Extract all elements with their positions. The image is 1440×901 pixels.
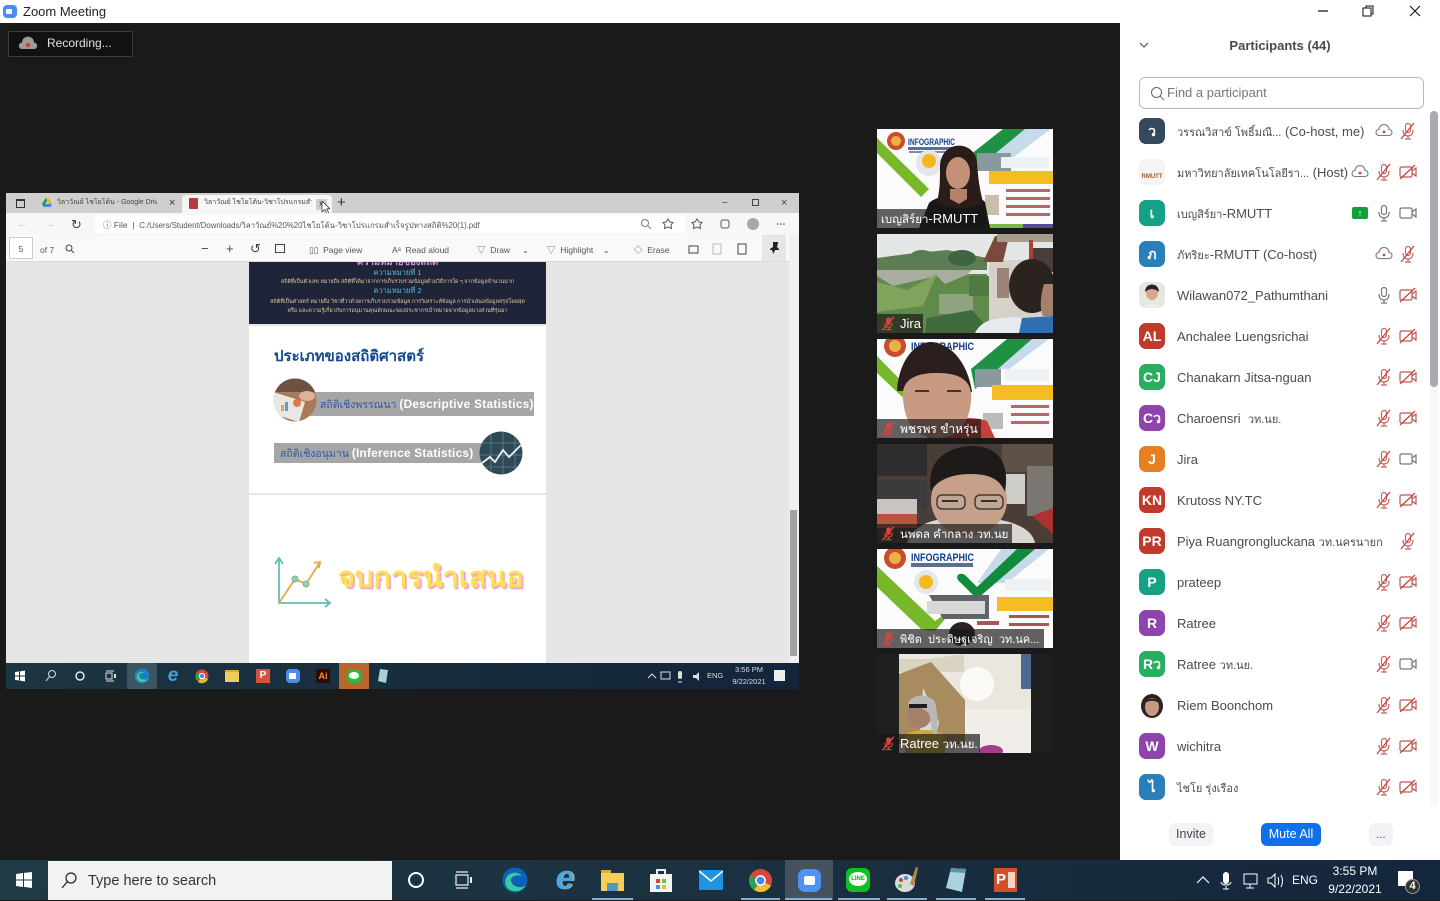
descriptive bar <box>289 392 534 416</box>
name: Riem Boonchom <box>1177 698 1273 713</box>
descriptive photo <box>274 378 316 422</box>
pdf tool icons <box>688 244 746 254</box>
notification bubble <box>1398 871 1413 886</box>
erase: ◇ Erase <box>634 245 669 255</box>
participant name: พชรพร ขำหรุ่น <box>900 422 978 436</box>
page count: of 7 <box>40 245 54 255</box>
name: Jira <box>1177 452 1198 467</box>
icon: muted <box>882 316 894 331</box>
video tile: พชรพร <box>877 339 1053 438</box>
new tab: + <box>337 194 346 211</box>
scrollbar thumb <box>790 510 797 656</box>
icon: recording cloud <box>18 36 38 49</box>
participant name: Jira <box>900 316 921 331</box>
meaning 1 text: สถิติที่เป็นตัวเลข หมายถึง สถิติที่ได้มาจากการเก็บรวบรวมข้อมูลด้วยวิธีการใด ๆ จากข้อมูลจำนวนมาก <box>281 279 514 285</box>
clock: 3:56 PM <box>735 665 763 674</box>
participant row 16 <box>1120 725 1430 766</box>
name: เบญสิร์ยา-RMUTT <box>1177 206 1272 221</box>
share indicator <box>1352 207 1368 219</box>
system tray <box>648 665 785 686</box>
slide background with presenter: INFOGRAPHIC <box>908 137 955 147</box>
tab close hover: × <box>319 199 324 210</box>
icon: powerpoint <box>256 669 270 683</box>
icon: edge active <box>127 663 157 689</box>
icon: edge <box>502 867 528 893</box>
icon: cortana <box>407 871 425 889</box>
participant row 14 <box>1120 643 1430 684</box>
participant row 4 <box>1120 233 1430 274</box>
collapse chevron <box>1139 41 1149 49</box>
window controls <box>1318 6 1420 16</box>
tray icons <box>648 671 699 682</box>
pdf page: definition dark slide <box>249 262 546 324</box>
avatar <box>1139 774 1165 800</box>
mute all button: Mute All <box>1269 827 1313 841</box>
video tile: Jira <box>877 234 1053 333</box>
slide background with presenter <box>877 129 1053 228</box>
participant row 9 <box>1120 438 1430 479</box>
icon: zoom logo <box>3 5 17 18</box>
icon: chrome <box>749 869 772 892</box>
invite button: Invite <box>1176 827 1206 841</box>
icon: mail <box>699 870 723 890</box>
shared screen taskbar <box>6 663 799 689</box>
avatar: PR <box>1142 533 1162 549</box>
icon: cortana <box>75 671 85 681</box>
video tile: พิชิต <box>877 549 1053 648</box>
icon: line: LINE <box>851 876 865 882</box>
avatar: R <box>1147 615 1157 631</box>
icon: task view <box>106 670 116 682</box>
panel: participants <box>1120 0 1440 860</box>
icon: folder <box>225 670 239 682</box>
search box <box>48 861 392 900</box>
icon: paint <box>894 866 918 894</box>
name: ภัทริยะ-RMUTT (Co-host) <box>1177 247 1317 262</box>
icon: muted <box>882 736 894 751</box>
participant name: พิชิต ประดิษฐเจริญ วท.นค... <box>900 634 1039 646</box>
icon: search <box>46 670 56 682</box>
system tray icons <box>1195 871 1285 891</box>
tab actions icon <box>16 199 25 208</box>
icon: illustrator: Ai <box>318 671 328 681</box>
page view: ▯▯ Page view <box>309 245 362 255</box>
clock <box>1325 862 1385 898</box>
name label: เบญสิร์ยา-RMUTT <box>881 211 978 226</box>
invite button <box>1169 823 1213 846</box>
closing text: จบการนำเสนอ <box>338 562 524 594</box>
nav buttons <box>17 217 82 232</box>
panel heading: Participants (44) <box>1229 38 1331 53</box>
icon: zoom active <box>785 860 833 900</box>
avatar <box>1139 159 1165 185</box>
language: ENG <box>1292 873 1318 887</box>
meaning 2 text: สถิติที่เป็นศาสตร์ หมายถึง วิชาที่ว่าด้วยการเก็บรวบรวมข้อมูล การวิเคราะห์ข้อมูล การนำเสนอข้อมูลสรุปโดยสุด <box>270 299 525 305</box>
icon: muted <box>882 526 894 541</box>
room with participant <box>899 654 1031 753</box>
participant row 12 <box>1120 561 1430 602</box>
icon: line <box>846 868 870 892</box>
pdf toolbar: + <box>226 241 234 256</box>
share indicator: ↑ <box>1358 208 1362 218</box>
inference label: สถิติเชิงอนุมาน (Inference Statistics) <box>280 446 473 460</box>
avatar: ภ <box>1147 246 1157 262</box>
name: Chanakarn Jitsa-nguan <box>1177 370 1311 385</box>
icon: powerpoint: P <box>260 670 266 681</box>
avatar: CJ <box>1143 369 1161 385</box>
slide background <box>877 549 1053 646</box>
icon: search <box>1150 86 1165 101</box>
highlight: ▽ Highlight ⌄ <box>547 245 610 255</box>
recording text: Recording... <box>47 36 112 50</box>
avatar <box>1139 364 1165 390</box>
pdf scrollbar <box>789 235 799 663</box>
avatar <box>1139 446 1165 472</box>
tab close: × <box>169 197 175 209</box>
name: Anchalee Luengsrichai <box>1177 329 1309 344</box>
name label <box>877 314 923 333</box>
avatar: J <box>1148 451 1156 467</box>
meaning 1 heading: ความหมายที่ 1 <box>373 268 422 277</box>
pdf page: end of presentation <box>249 495 546 663</box>
inference photo <box>480 432 522 474</box>
window title: Zoom Meeting <box>23 4 106 19</box>
clock: 9/22/2021 <box>1328 882 1382 896</box>
avatar photo <box>1139 692 1165 718</box>
avatar <box>1139 610 1165 636</box>
icon: search <box>60 871 78 889</box>
icon: muted <box>882 421 894 436</box>
icon: file explorer <box>601 868 624 893</box>
descriptive label: สถิติเชิงพรรณนา (Descriptive Statistics) <box>320 397 534 411</box>
avatar: AL <box>1143 328 1161 344</box>
participant row 11 <box>1120 520 1430 561</box>
video tile: นพดล <box>877 444 1053 543</box>
participant row 7 <box>1120 356 1430 397</box>
icon: notepad <box>944 867 968 893</box>
slide background with participant: INFOGRAPHIC <box>911 341 974 353</box>
icon: mouse cursor <box>322 201 330 213</box>
avatar <box>1139 323 1165 349</box>
icon: illustrator <box>316 669 330 683</box>
slide background with participant <box>877 339 1053 438</box>
more button <box>1369 823 1393 846</box>
recording badge <box>8 31 133 57</box>
notifications <box>1398 871 1418 895</box>
notification count: 4 <box>1409 880 1416 892</box>
participant row 5 <box>1120 274 1430 315</box>
nav buttons: ← <box>17 218 28 230</box>
windows taskbar <box>0 860 1440 900</box>
more button: ... <box>1376 829 1386 841</box>
draw: ▽ Draw ⌄ <box>477 245 529 255</box>
tab: pdf active <box>182 195 332 213</box>
participant row 2 <box>1120 151 1430 192</box>
icon: chrome <box>195 670 208 684</box>
icon: line chart <box>274 556 332 608</box>
clock: 3:55 PM <box>1333 864 1377 878</box>
icon: powerpoint: P <box>996 871 1006 888</box>
name label <box>877 734 980 753</box>
pdf page: types of statistics <box>249 326 546 493</box>
shared screen: browser with PDF <box>6 193 799 689</box>
window controls: – <box>722 197 728 208</box>
name: prateep <box>1177 575 1221 590</box>
nav buttons: ↻ <box>71 217 82 232</box>
title bar <box>0 0 1120 23</box>
participant row 3 <box>1120 192 1430 233</box>
icon: start <box>15 670 25 682</box>
search placeholder: Type here to search <box>88 873 216 889</box>
active app markers <box>592 898 1025 900</box>
icon: internet explorer: e <box>168 665 178 686</box>
icon: start <box>15 871 33 889</box>
tab: google drive <box>42 197 175 209</box>
inference bar <box>274 443 482 463</box>
pin button <box>762 235 786 261</box>
avatar: เ <box>1150 205 1154 221</box>
participant row 17 <box>1120 766 1430 807</box>
name: Piya Ruangrongluckana วท.นครนายก <box>1177 534 1383 549</box>
pdf toolbar <box>6 235 799 262</box>
browser toolbar icons <box>641 218 785 230</box>
participant row 10 <box>1120 479 1430 520</box>
search field <box>1139 77 1424 109</box>
avatar <box>1139 405 1165 431</box>
river scene with participant <box>877 234 1053 333</box>
icon: powerpoint <box>994 868 1017 892</box>
name: Wilawan072_Pathumthani <box>1177 288 1328 303</box>
clock: 9/22/2021 <box>732 677 766 686</box>
participant row 6 <box>1120 315 1430 356</box>
avatar photo <box>1139 282 1165 308</box>
window controls: × <box>781 197 787 209</box>
pdf toolbar: ↺ <box>250 241 261 256</box>
browser address bar <box>6 213 799 235</box>
tab close hover <box>316 199 327 210</box>
avatar: RMUTT <box>1142 174 1162 180</box>
meaning 2 text: หรือ และความรู้เกี่ยวกับการอนุมานคุณลักษณะของประชากรเป้าหมายจากข้อมูลบางส่วนที่รุ่นมา <box>287 308 508 314</box>
participant name: นพดล คำกลาง วท.นย <box>900 529 1008 541</box>
icon: page search <box>66 244 74 254</box>
participant row 8 <box>1120 397 1430 438</box>
avatar <box>1139 118 1165 144</box>
icon: notepad <box>378 669 388 683</box>
video tile: Ratree วท.นย. <box>877 654 1053 753</box>
icon: zoom <box>286 669 300 683</box>
office room with participant <box>877 444 1053 543</box>
participant row 13 <box>1120 602 1430 643</box>
avatar <box>1139 733 1165 759</box>
url field <box>95 215 685 233</box>
page number box <box>9 237 33 259</box>
icon: drive <box>42 198 52 207</box>
participant name: Ratree วท.นย. <box>900 736 978 751</box>
name: มหาวิทยาลัยเทคโนโลยีรา... (Host) <box>1177 165 1348 180</box>
search placeholder: Find a participant <box>1167 85 1267 100</box>
slide heading: ประเภทของสถิติศาสตร์ <box>274 348 424 365</box>
icon: internet explorer: e <box>556 859 574 897</box>
meaning 2 heading: ความหมายที่ 2 <box>373 286 422 295</box>
name: Ratree วท.นย. <box>1177 657 1253 672</box>
avatar: W <box>1145 738 1159 754</box>
name: ไชโย รุ่งเรือง <box>1177 783 1238 795</box>
name: Krutoss NY.TC <box>1177 493 1262 508</box>
name: wichitra <box>1177 739 1221 754</box>
avatar <box>1139 200 1165 226</box>
nav buttons: → <box>44 218 55 230</box>
avatar <box>1139 569 1165 595</box>
icon: task view <box>455 870 473 890</box>
avatar: P <box>1147 574 1157 590</box>
name: Charoensri วท.นย. <box>1177 411 1281 426</box>
avatar <box>1139 487 1165 513</box>
icon: store <box>650 867 672 893</box>
clock <box>732 665 766 686</box>
participant row 15 <box>1120 684 1430 725</box>
language: ENG <box>707 671 723 680</box>
name: วรรณวิสาข์ โพธิ์มณี... (Co-host, me) <box>1177 124 1364 139</box>
participant row 1 <box>1120 110 1430 151</box>
scrollbar track <box>1430 111 1438 806</box>
browser tab strip <box>6 193 799 213</box>
avatar <box>1139 241 1165 267</box>
icon: line active <box>339 663 369 689</box>
avatar <box>1139 651 1165 677</box>
read aloud: Aᵃ Read aloud <box>392 245 449 255</box>
meaning 2 text <box>270 298 525 314</box>
avatar: ไ <box>1148 779 1156 795</box>
avatar: ว <box>1148 123 1156 139</box>
notification count <box>1405 879 1420 894</box>
icon: muted <box>882 631 894 646</box>
avatar: Rว <box>1143 656 1161 672</box>
slide background: INFOGRAPHIC <box>911 552 974 564</box>
video tile: เบญสิร์ยา-RMUTT <box>877 129 1053 228</box>
name label <box>877 524 1012 543</box>
url text: ⓘ File | C:/Users/Student/Downloads/วิลาวัณย์%20%20ไชโยโต้น-วิชาโปรแกรมสำเร็จรูปทางสถิติ%20(1).pdf <box>103 220 480 230</box>
avatar: KN <box>1142 492 1162 508</box>
name: Ratree <box>1177 616 1216 631</box>
notifications <box>774 670 785 681</box>
avatar <box>1139 528 1165 554</box>
zoom controls: − <box>201 241 209 256</box>
mute all button <box>1261 823 1321 846</box>
name label <box>877 629 1044 648</box>
icon: pdf <box>189 198 198 209</box>
window controls <box>722 197 787 209</box>
avatar: Cว <box>1143 410 1161 426</box>
name label <box>877 419 981 438</box>
zoom controls <box>201 241 285 256</box>
scrollbar thumb <box>1430 111 1438 387</box>
page number box: 5 <box>19 244 23 254</box>
